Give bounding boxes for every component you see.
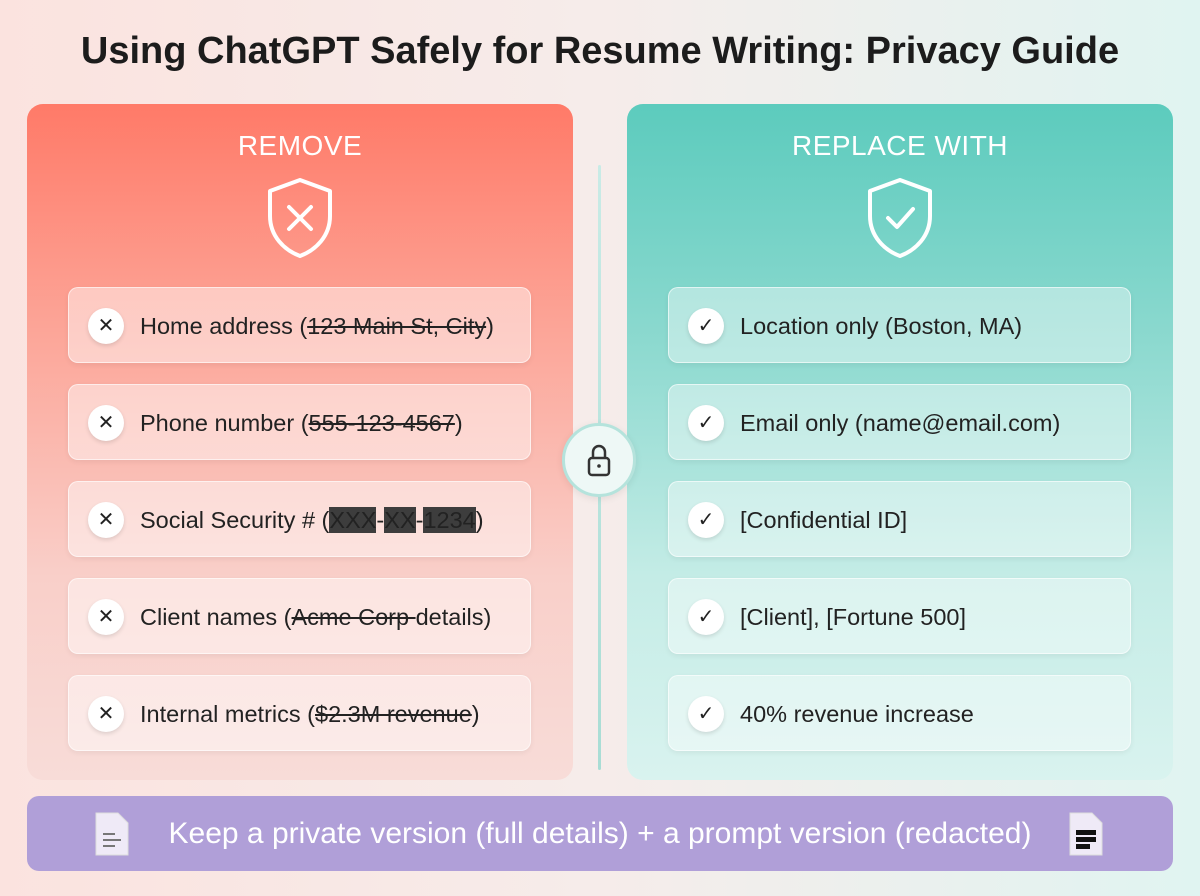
bottom bar: Keep a private version (full details) + a prompt version (redacted)	[169, 817, 1031, 850]
item: client: ✓	[698, 606, 714, 628]
item: email	[668, 384, 1131, 460]
item: confidential id: [Confidential ID]	[740, 507, 907, 533]
item: metrics: ✕	[98, 703, 114, 725]
item: confidential id: ✓	[698, 509, 714, 531]
icon: shield x	[268, 178, 332, 258]
item: ssn	[68, 481, 531, 557]
item: client	[668, 578, 1131, 654]
heading: remove: REMOVE	[238, 130, 362, 161]
item: revenue	[668, 675, 1131, 751]
icon: shield check	[868, 178, 932, 258]
icon: redacted document	[1070, 812, 1102, 856]
bottom bar	[27, 796, 1173, 871]
item: email: ✓	[698, 412, 714, 434]
item: metrics	[68, 675, 531, 751]
title: Using ChatGPT Safely for Resume Writing: Privacy Guide	[81, 30, 1119, 72]
item: client names	[68, 578, 531, 654]
panel: remove	[27, 104, 573, 780]
item: phone	[68, 384, 531, 460]
icon: lock	[562, 423, 636, 497]
item: phone: ✕	[98, 412, 114, 434]
item: ssn: ✕	[98, 509, 114, 531]
item: client: [Client], [Fortune 500]	[740, 604, 966, 630]
item: metrics: Internal metrics ($2.3M revenue)	[140, 701, 480, 727]
item: home address	[68, 287, 531, 363]
item: confidential id	[668, 481, 1131, 557]
item: location: Location only (Boston, MA)	[740, 313, 1022, 339]
item: home address: Home address (123 Main St, City)	[140, 313, 494, 339]
item: client names: ✕	[98, 606, 114, 628]
item: revenue: ✓	[698, 703, 714, 725]
item: home address: ✕	[98, 315, 114, 337]
item: location	[668, 287, 1131, 363]
panel: replace with	[627, 104, 1173, 780]
heading: replace with: REPLACE WITH	[792, 130, 1008, 161]
icon: document	[96, 812, 128, 856]
item: revenue: 40% revenue increase	[740, 701, 974, 727]
item: ssn: Social Security # (XXX-XX-1234)	[140, 507, 484, 533]
item: phone: Phone number (555-123-4567)	[140, 410, 463, 436]
item: client names: Client names (Acme Corp details)	[140, 604, 491, 630]
item: email: Email only (name@email.com)	[740, 410, 1060, 436]
item: location: ✓	[698, 315, 714, 337]
